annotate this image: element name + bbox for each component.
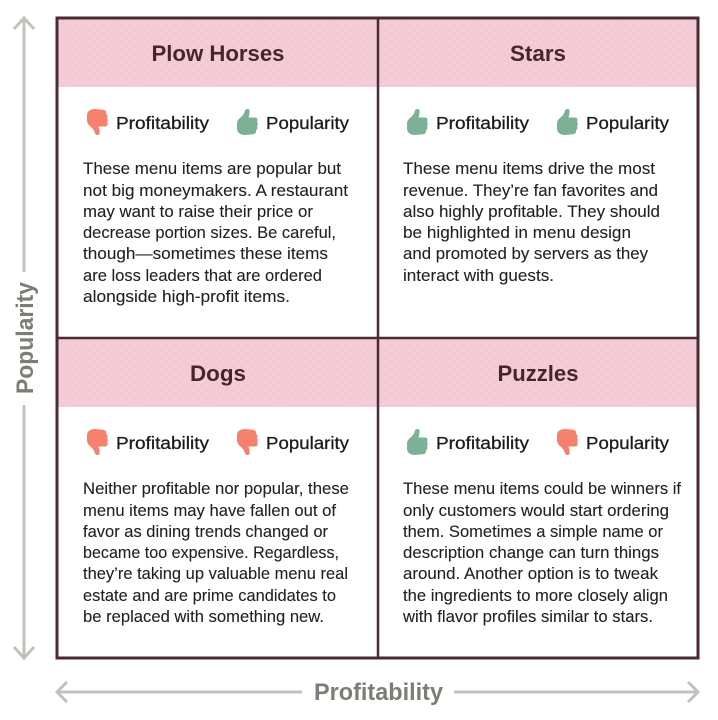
arrow: up (14, 18, 34, 272)
text block: Stars description (403, 159, 660, 285)
text block: Dogs description: became too expensive. Regardless, (83, 543, 339, 562)
text block: Puzzles description: the ingredients to more closely align (403, 586, 668, 605)
heading band: Puzzles (378, 338, 698, 407)
panel: Plow Horses (57, 18, 378, 306)
label: Popularity: Popularity (266, 433, 349, 453)
text block: Dogs description: estate and are prime candidates to (83, 586, 336, 605)
heading band: Stars: Stars (510, 41, 566, 66)
heading band: Stars (378, 18, 698, 87)
text block: Plow Horses description: alongside high-profit items. (83, 287, 290, 306)
text block: Plow Horses description: decrease portion sizes. Be careful, (83, 223, 336, 242)
icon: thumbs up profitability (407, 429, 428, 455)
heading band: Plow Horses (57, 18, 378, 87)
text block: Stars description: also highly profitable. They should (403, 202, 660, 221)
text block: Stars description: revenue. They’re fan favorites and (403, 181, 658, 200)
text block: Puzzles description: with flavor profiles similar to stars. (402, 607, 653, 626)
text block: Plow Horses description: though—sometimes these items (83, 244, 328, 263)
panel: Stars (378, 18, 698, 285)
panel: Dogs (57, 338, 378, 626)
icon: thumbs up popularity (557, 109, 578, 135)
heading band: Plow Horses: Plow Horses (152, 41, 284, 66)
text block: Puzzles description (402, 479, 681, 626)
label: Profitability: Profitability (436, 113, 529, 133)
text block: Plow Horses description: not big moneymakers. A restaurant (83, 181, 348, 200)
icon: thumbs down popularity (557, 429, 578, 455)
text block: Dogs description: they’re taking up valuable menu real (83, 564, 348, 583)
icon: thumbs down profitability (87, 109, 108, 135)
text block: Puzzles description: them. Sometimes a simple name or (403, 522, 663, 541)
text block: Plow Horses description: may want to raise their price or (83, 202, 313, 221)
text block: Stars description: These menu items drive the most (403, 159, 655, 178)
axis label: Popularity: Popularity (12, 281, 39, 394)
label: Popularity: Popularity (266, 113, 349, 133)
text block: Stars description: interact with guests. (403, 266, 554, 285)
label: Profitability: Profitability (116, 113, 209, 133)
text block: Stars description: be highlighted in menu design (403, 223, 631, 242)
arrow: left (57, 682, 302, 702)
text block: Dogs description: favor as dining trends changed or (83, 522, 328, 541)
label: Popularity: Popularity (586, 113, 669, 133)
text block: Puzzles description: These menu items could be winners if (403, 479, 681, 498)
horizontal axis: Profitability (57, 679, 698, 706)
text block: Puzzles description: only customers would start ordering (403, 501, 669, 520)
text block: Dogs description: Neither profitable nor popular, these (83, 479, 349, 498)
vertical axis: Popularity (12, 18, 39, 658)
text block: Dogs description: menu items may have fallen out of (83, 501, 336, 520)
matrix frame (57, 18, 698, 658)
icon: thumbs up profitability (407, 109, 428, 135)
axis label: Profitability: Profitability (314, 679, 444, 706)
text block: Stars description: and promoted by servers as they (403, 244, 648, 263)
arrow: right (454, 682, 698, 702)
icon: thumbs down popularity (237, 429, 258, 455)
text block: Plow Horses description (83, 159, 348, 306)
arrow: down (14, 405, 34, 658)
label: Popularity: Popularity (586, 433, 669, 453)
heading band: Dogs (57, 338, 378, 407)
heading band: Dogs: Dogs (190, 361, 246, 386)
label: Profitability: Profitability (436, 433, 529, 453)
text block: Plow Horses description: These menu items are popular but (83, 159, 341, 178)
heading band: Puzzles: Puzzles (498, 361, 578, 386)
panel: Puzzles (378, 338, 698, 626)
text block: Dogs description: be replaced with something new. (83, 607, 324, 626)
text block: Puzzles description: around. Another option is to tweak (403, 564, 658, 583)
icon: thumbs up popularity (237, 109, 258, 135)
text block: Plow Horses description: are loss leaders that are ordered (83, 266, 322, 285)
label: Profitability: Profitability (116, 433, 209, 453)
text block: Puzzles description: description change can turn things (403, 543, 659, 562)
icon: thumbs down profitability (87, 429, 108, 455)
text block: Dogs description (83, 479, 349, 626)
